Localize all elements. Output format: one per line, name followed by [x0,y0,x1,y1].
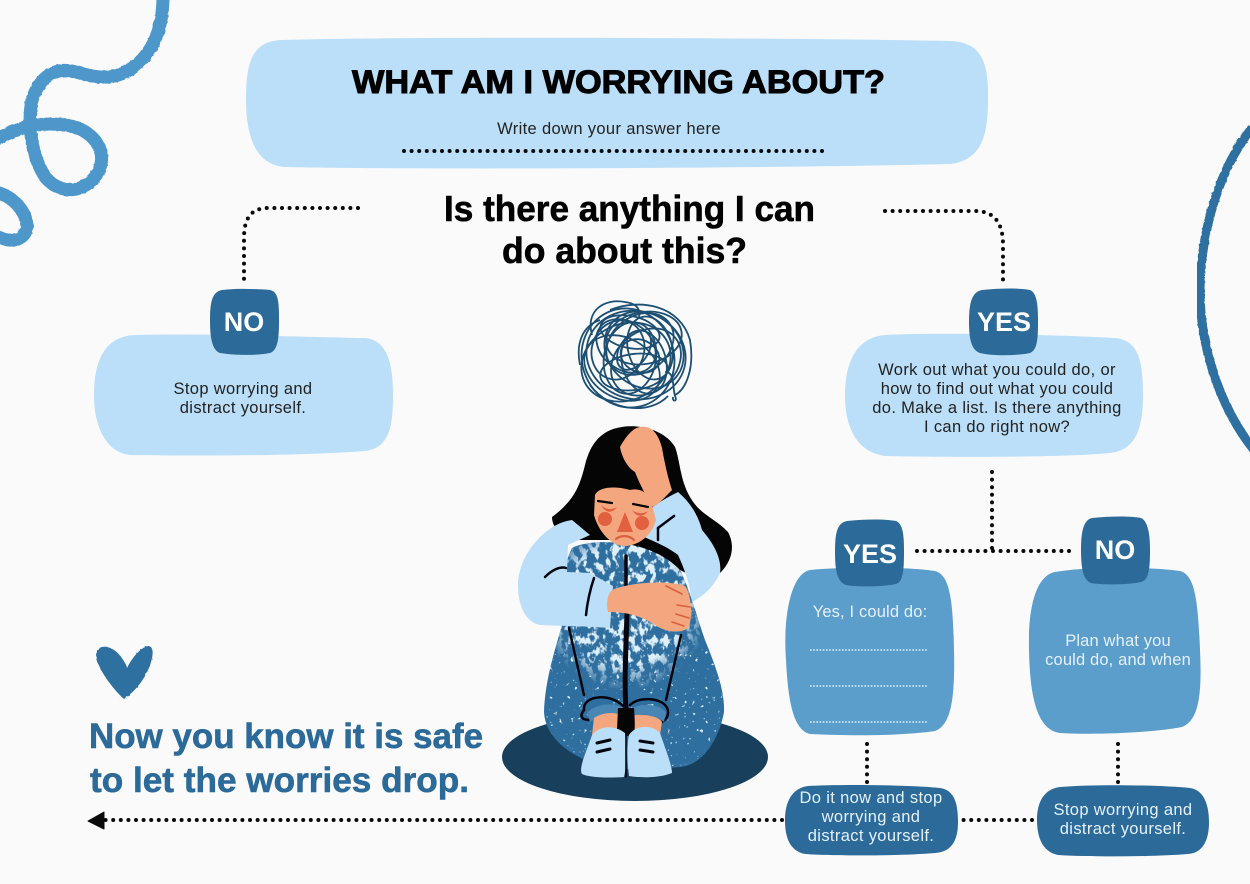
connector: branch between yes and no [917,549,1070,553]
black gap between ankles [617,708,635,736]
badge: yes [969,288,1038,355]
plan text: Plan what you [1065,632,1171,650]
yes answer text: I can do right now? [924,418,1070,436]
panel: yes answer [845,334,1143,457]
central question: Is there anything I can [444,188,815,229]
ankles [592,713,620,735]
closing message: Now you know it is safe [89,717,483,756]
panel: what am I worrying about [246,38,988,168]
do it now text: Do it now and stop [800,789,942,807]
finger lines [666,586,690,626]
panel: do it now [785,785,958,855]
badge: second yes [835,520,904,586]
do it now text: distract yourself. [808,827,934,845]
hand on head [620,427,672,507]
fringe [590,440,640,495]
hair [552,426,732,580]
answer dotted line [404,149,826,153]
illustration: tangled thought scribble [568,295,699,421]
panel: plan what you could do [1029,568,1201,734]
yes answer text: do. Make a list. Is there anything [872,399,1122,417]
leg seams [569,556,681,722]
forearm and hand on knees [607,583,691,632]
shoes [581,727,626,778]
central question: do about this? [502,230,747,271]
decorative arc right [1200,128,1250,450]
panel: stop worrying [1037,785,1209,856]
prompt text: Write down your answer here [497,120,721,138]
icon: heart [96,646,153,699]
plan text: could do, and when [1045,651,1191,669]
badge: second no [1081,516,1150,584]
left sleeve [518,520,613,628]
closing message: to let the worries drop. [90,761,469,800]
stop worrying text: Stop worrying and [1054,801,1192,819]
badge: no [210,289,279,355]
panel: yes I could do [785,567,954,735]
connector: question to yes [885,211,1003,285]
connector: question to no [244,208,358,285]
yes answer text: Work out what you could do, or [878,361,1116,379]
illustration: worried girl [502,426,768,801]
no answer text: distract yourself. [180,399,306,417]
shoe marks [597,735,653,777]
connector: yes box to do it now [865,744,869,782]
panel: no answer [94,334,393,456]
light speckle near hem [544,640,724,768]
decorative squiggle top left [0,0,163,240]
connector: yes panel down to branch [990,472,994,548]
yes answer text: how to find out what you could [881,380,1113,398]
title: WHAT AM I WORRYING ABOUT? [352,64,885,100]
sleeve marks [545,516,674,615]
face [594,488,656,546]
distressed chest and shins [556,542,700,688]
closed eyes [598,501,648,540]
ground shadow [502,713,768,801]
cuffs [587,704,624,722]
jumpsuit texture [544,530,724,768]
stop worrying text: distract yourself. [1060,820,1186,838]
badge: no: NO [224,307,264,337]
writing lines [810,650,928,722]
badge: second no: NO [1095,535,1135,565]
no answer text: Stop worrying and [174,380,312,398]
central question [444,188,815,271]
jumpsuit [544,542,724,769]
badge: second yes: YES [843,539,897,569]
closing message [89,717,483,800]
arrow: return line to the left [88,812,1032,829]
do it now text: worrying and [821,808,920,826]
cheeks and nose [598,505,649,532]
connector: plan box to stop worrying [1116,744,1120,782]
yes I could do text: Yes, I could do: [813,603,927,621]
badge: yes: YES [977,307,1031,337]
right sleeve [640,492,720,602]
